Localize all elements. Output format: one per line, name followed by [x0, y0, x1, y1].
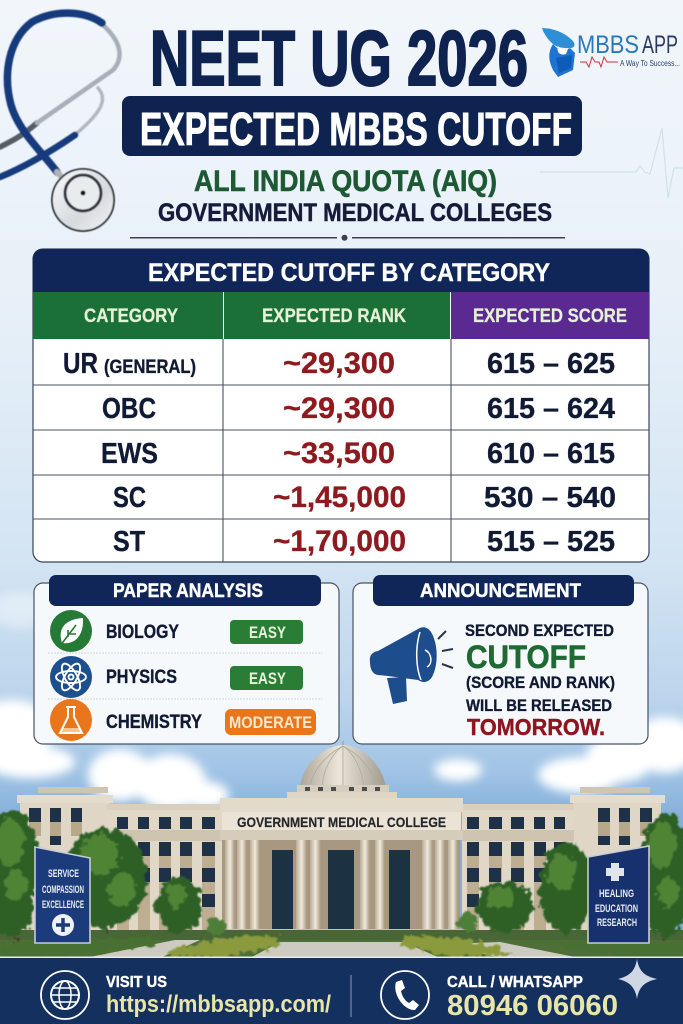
- decorative ECG line: [540, 128, 683, 198]
- panel: paper analysis: [34, 575, 339, 744]
- paper analysis heading: [49, 575, 321, 606]
- physics row: PHYSICS: [106, 667, 177, 688]
- biology row: [50, 610, 303, 652]
- clouds: [0, 592, 683, 810]
- visit us: https://mbbsapp.com/: [106, 991, 331, 1018]
- table title bar: EXPECTED CUTOFF BY CATEGORY: [148, 259, 550, 287]
- columns: [225, 840, 458, 929]
- icon: phone: [381, 971, 429, 1019]
- physics row: EASY: [249, 670, 286, 688]
- heading: government medical colleges: GOVERNMENT MEDICAL COLLEGES: [158, 199, 552, 227]
- row: OBC: OBC: [102, 393, 156, 425]
- visit us: [106, 974, 331, 1018]
- column headers: EXPECTED SCORE: [473, 306, 627, 327]
- row: SC: ~1,45,000: [273, 481, 406, 514]
- row: EWS: EWS: [101, 438, 158, 470]
- sign: left: [35, 847, 90, 943]
- table: expected cutoff by category: [33, 249, 649, 562]
- left wing: [107, 804, 222, 935]
- stethoscope: [0, 13, 120, 231]
- sign: left: COMPASSION: [42, 884, 84, 896]
- column headers: [33, 292, 649, 339]
- building name: GOVERNMENT MEDICAL COLLEGE: [237, 814, 446, 830]
- announcement text: (SCORE AND RANK): [466, 674, 615, 692]
- row: ST: [113, 525, 615, 558]
- sign: right: HEALING: [599, 888, 634, 900]
- call whatsapp: CALL / WHATSAPP: [447, 974, 583, 991]
- column headers: CATEGORY: [84, 306, 178, 327]
- logo: MBBS APP: [542, 28, 680, 77]
- dolphin mark: [542, 28, 574, 48]
- row: OBC: [102, 392, 615, 425]
- divider: [130, 235, 565, 241]
- call whatsapp: 80946 06060: [447, 990, 618, 1022]
- entrance glass: [272, 850, 410, 930]
- subtitle banner: [122, 96, 582, 156]
- announcement heading: ANNOUNCEMENT: [420, 581, 581, 602]
- biology row: EASY: [249, 624, 286, 642]
- row: EWS: ~33,500: [283, 437, 395, 470]
- chemistry row: CHEMISTRY: [106, 712, 202, 733]
- icon: globe: [41, 971, 89, 1019]
- panel: announcement: [353, 575, 648, 744]
- announcement text: TOMORROW.: [467, 714, 605, 740]
- building: government medical college: [17, 741, 665, 944]
- sign: left: SERVICE: [48, 868, 79, 880]
- paper analysis heading: PAPER ANALYSIS: [113, 581, 263, 602]
- row: EWS: 610 – 615: [487, 438, 615, 470]
- icon: megaphone: [370, 627, 453, 704]
- announcement heading: [373, 575, 634, 606]
- row: ST: ST: [113, 526, 145, 558]
- central block: [220, 798, 463, 934]
- table title bar: [33, 249, 649, 292]
- call whatsapp: [447, 974, 618, 1022]
- row: UR: ~29,300: [283, 347, 395, 380]
- right wing: [462, 804, 574, 935]
- row: SC: [113, 481, 616, 514]
- sign: left: EXCELLENCE: [42, 899, 84, 911]
- chemistry row: MODERATE: [229, 714, 312, 732]
- ground and road: [0, 930, 683, 958]
- row: UR: UR: [63, 348, 98, 380]
- announcement text: WILL BE RELEASED: [466, 697, 612, 715]
- logo: MBBS APP: MBBS: [577, 31, 639, 59]
- sign: right: EDUCATION: [595, 903, 638, 915]
- row: ST: 515 – 525: [487, 526, 615, 558]
- footer: [0, 956, 683, 1024]
- announcement text: [465, 622, 615, 740]
- sign: right: RESEARCH: [597, 917, 637, 929]
- chemistry row: [50, 699, 316, 741]
- column headers: EXPECTED RANK: [262, 306, 406, 327]
- steps: [222, 929, 462, 944]
- announcement text: CUTOFF: [466, 639, 586, 675]
- row: OBC: ~29,300: [283, 392, 395, 425]
- trees: [0, 809, 683, 943]
- row: SC: SC: [113, 482, 146, 514]
- visit us: VISIT US: [106, 974, 167, 991]
- hedges: [0, 936, 683, 957]
- row: OBC: 615 – 624: [487, 393, 615, 425]
- announcement text: SECOND EXPECTED: [465, 622, 614, 640]
- physics row: [50, 656, 303, 698]
- row: UR: 615 – 625: [487, 348, 615, 380]
- table grid lines: [33, 339, 649, 562]
- sparkle: [618, 959, 657, 999]
- biology row: BIOLOGY: [106, 622, 179, 643]
- heading: all india quota: ALL INDIA QUOTA (AIQ): [194, 165, 497, 198]
- row: EWS: [101, 437, 615, 470]
- title: NEET UG 2026: [150, 14, 528, 102]
- row: UR: (GENERAL): [104, 357, 196, 378]
- left tower: [17, 787, 113, 938]
- row: ST: ~1,70,000: [273, 525, 406, 558]
- row: SC: 530 – 540: [484, 482, 616, 514]
- row: UR: [63, 347, 615, 380]
- right tower: [570, 787, 665, 938]
- dome: [287, 741, 397, 800]
- sign: right: [588, 846, 649, 943]
